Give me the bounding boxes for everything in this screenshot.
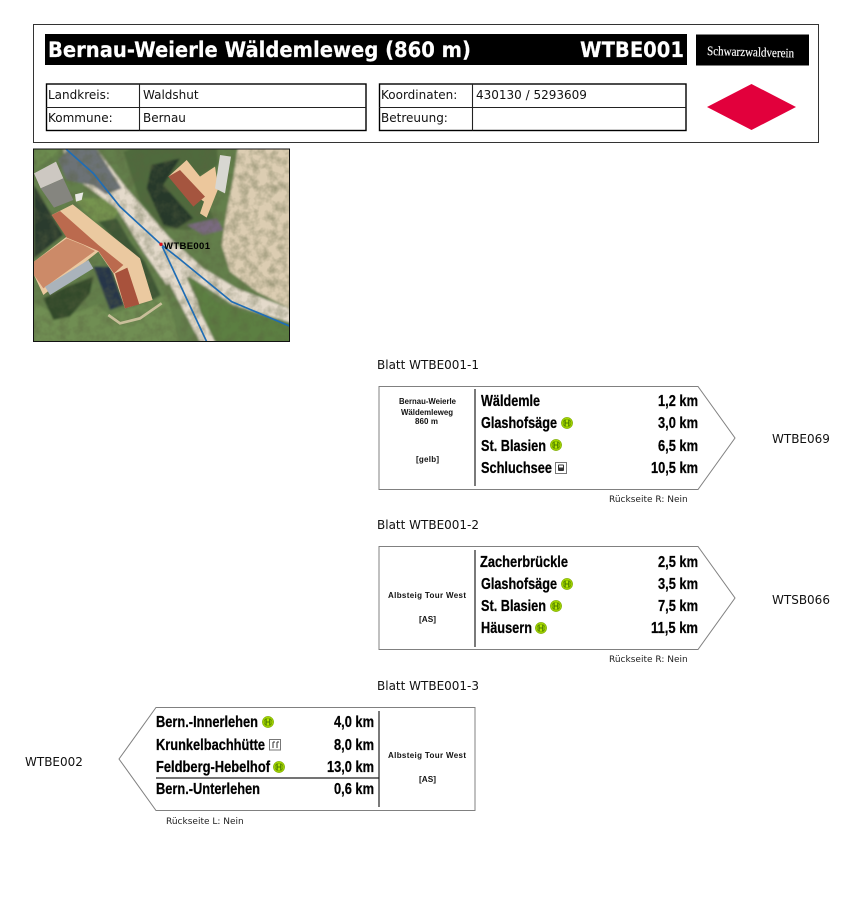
destination rows — [481, 393, 698, 477]
table: region — [46, 84, 366, 130]
sign: WTBE001-1 — [379, 386, 735, 490]
sign info: tour name: Albsteig Tour West — [388, 591, 466, 600]
sign info: route name: Wäldemleweg — [401, 408, 453, 417]
destination rows — [480, 554, 698, 637]
destination rows: Häusern — [481, 620, 532, 637]
destination rows: Wäldemle — [481, 393, 540, 410]
destination rows: 2,5 km — [658, 554, 698, 571]
destination rows: 6,5 km — [658, 438, 698, 455]
map texture — [30, 145, 297, 345]
destination rows — [156, 714, 374, 798]
destination rows: 7,5 km — [658, 598, 698, 615]
destination rows: 3,0 km — [658, 415, 698, 432]
icon: bus stop — [550, 440, 562, 450]
table: region: Kommune: — [48, 111, 113, 125]
map label: WTBE001 — [164, 241, 211, 252]
icon: bus stop: H — [553, 601, 559, 611]
table: coordinates: Betreuung: — [381, 111, 448, 125]
sign info: tour name: [AS] — [419, 775, 436, 784]
sign info: tour name: [AS] — [419, 615, 436, 624]
logo: Schwarzwaldverein — [696, 34, 809, 66]
title bar: Bernau-Weierle Wäldemleweg (860 m) — [48, 38, 471, 62]
icon: bus stop — [274, 762, 284, 772]
table: coordinates: 430130 / 5293609 — [476, 88, 587, 102]
icon: red diamond — [707, 84, 796, 130]
sign: WTBE001-3 — [119, 708, 475, 810]
destination rows: Schluchsee — [481, 460, 552, 477]
sign info: tour name — [388, 591, 466, 624]
destination rows: Glashofsäge — [481, 415, 557, 432]
sign info: route name: [gelb] — [416, 455, 439, 464]
logo: Schwarzwaldverein: Schwarzwaldverein — [707, 43, 795, 60]
destination rows: Krunkelbachhütte — [156, 737, 265, 754]
heading: Blatt 1: Blatt WTBE001-1 — [377, 358, 479, 372]
table: region: Waldshut — [143, 88, 199, 102]
table: region: Landkreis: — [48, 88, 110, 102]
title bar — [45, 34, 687, 65]
heading: Blatt 2: Blatt WTBE001-2 — [377, 518, 479, 532]
destination rows: Zacherbrückle — [480, 554, 568, 571]
table: coordinates — [379, 84, 686, 130]
icon: bus stop — [262, 716, 274, 728]
sign info: route name: 860 m — [415, 417, 438, 426]
table: region: Bernau — [143, 111, 186, 125]
destination rows: 13,0 km — [327, 759, 374, 776]
icon: bus stop: H — [265, 717, 271, 727]
target: WTBE002: WTBE002 — [25, 755, 83, 769]
destination rows: 1,2 km — [658, 393, 698, 410]
icon: bus stop: H — [564, 418, 570, 428]
destination rows: 8,0 km — [334, 737, 374, 754]
sign info: route name: Bernau-Weierle — [399, 397, 457, 406]
icon: bus stop: H — [564, 579, 570, 589]
note: back side 1: Rückseite R: Nein — [609, 495, 688, 505]
icon: bus stop: H — [538, 623, 544, 633]
destination rows: Glashofsäge — [481, 576, 557, 593]
panel: header — [34, 24, 818, 142]
icon: bus stop: H — [553, 440, 559, 450]
destination rows: Bern.-Innerlehen — [156, 714, 258, 731]
note: back side 2: Rückseite R: Nein — [609, 655, 688, 665]
target: WTBE069: WTBE069 — [772, 432, 830, 446]
icon: train — [556, 462, 566, 474]
icon: bus stop — [562, 418, 572, 428]
icon: bus stop — [550, 600, 562, 612]
destination rows: Bern.-Unterlehen — [156, 781, 260, 798]
table: coordinates: Koordinaten: — [381, 88, 457, 102]
note: back side 3: Rückseite L: Nein — [166, 817, 244, 827]
destination rows: St. Blasien — [481, 598, 546, 615]
map: aerial photo — [30, 145, 297, 345]
destination rows: St. Blasien — [481, 438, 546, 455]
heading: Blatt 3: Blatt WTBE001-3 — [377, 679, 479, 693]
icon: bus stop — [562, 578, 572, 590]
icon: hut — [270, 740, 280, 750]
destination rows: 11,5 km — [651, 620, 698, 637]
sign info: route name — [399, 397, 457, 464]
destination rows: 10,5 km — [651, 460, 698, 477]
destination rows: 4,0 km — [334, 714, 374, 731]
sign info: tour name: Albsteig Tour West — [388, 751, 466, 760]
destination rows: Feldberg-Hebelhof — [156, 759, 271, 776]
icon: bus stop — [536, 622, 546, 634]
icon: bus stop: H — [276, 762, 282, 772]
title bar: WTBE001 — [580, 38, 684, 62]
sign: WTBE001-2 — [379, 546, 735, 650]
target: WTSB066: WTSB066 — [772, 593, 830, 607]
destination rows: 3,5 km — [658, 576, 698, 593]
sign info: tour name — [388, 751, 466, 784]
destination rows: 0,6 km — [334, 781, 374, 798]
